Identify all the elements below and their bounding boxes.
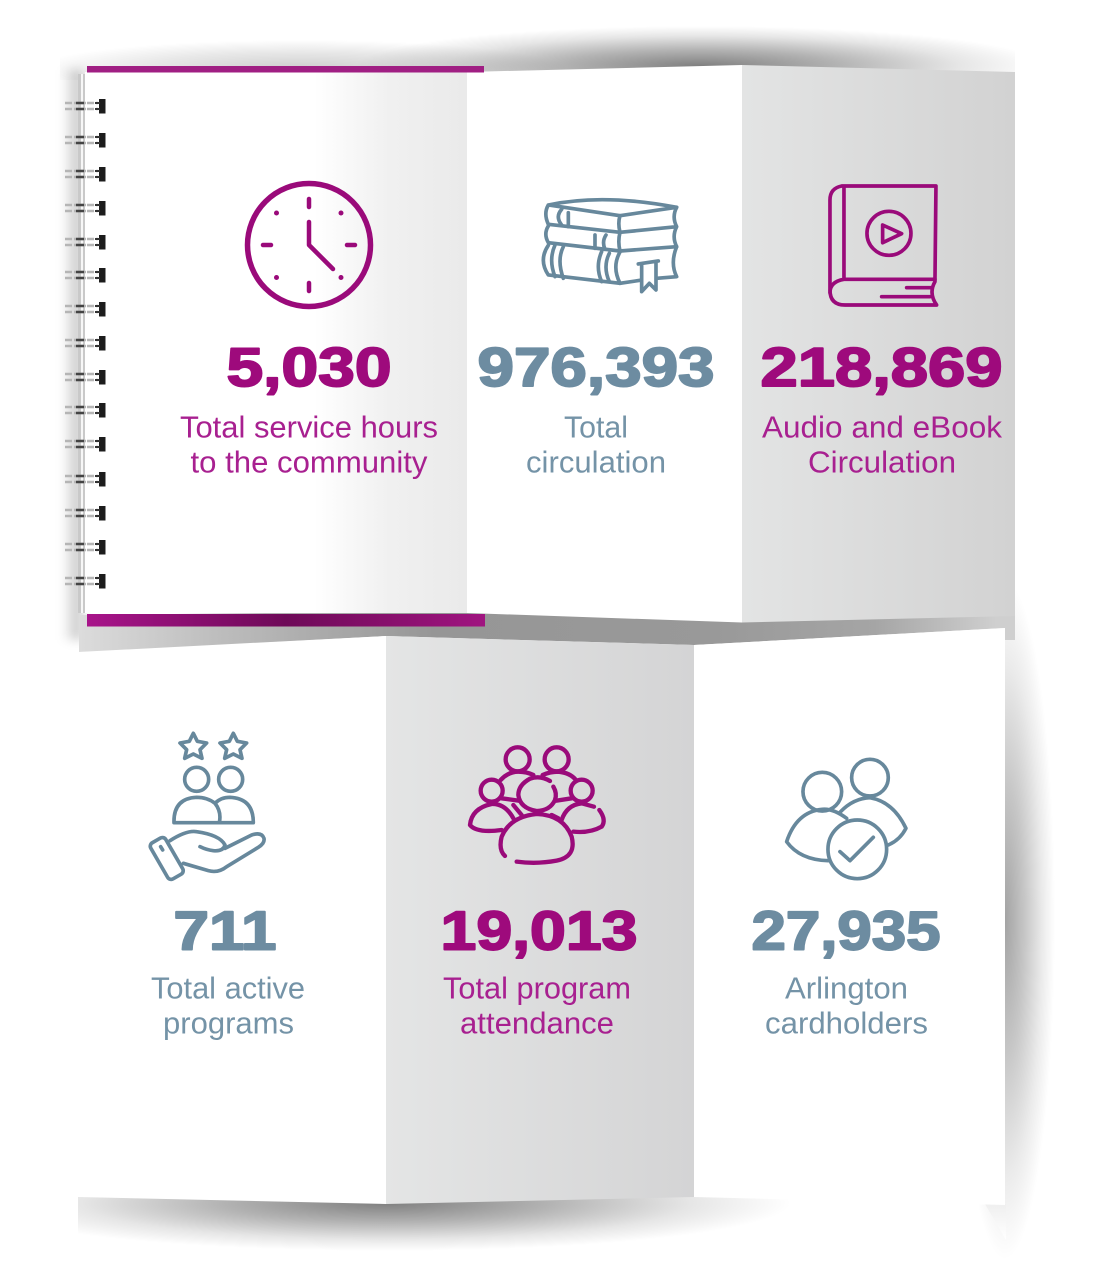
stat: circulation: circulation bbox=[526, 444, 666, 480]
stat: program attendance: attendance bbox=[460, 1006, 614, 1040]
panel: bottom centre page bbox=[386, 636, 694, 1204]
purple top strip bbox=[87, 66, 484, 72]
panel: top left notebook page bbox=[85, 72, 467, 613]
stat: service hours bbox=[180, 336, 438, 480]
stat: audio and ebook: 218,869 bbox=[760, 336, 1002, 398]
stat: circulation bbox=[478, 336, 714, 480]
icon: clock bbox=[248, 184, 370, 306]
stat: active programs: programs bbox=[163, 1006, 294, 1040]
stat: program attendance: Total program bbox=[443, 970, 631, 1006]
icon: group of people bbox=[470, 747, 604, 863]
stat: active programs: Total active bbox=[151, 970, 305, 1006]
stat: audio and ebook: Audio and eBook bbox=[762, 410, 1003, 444]
purple bottom strip bbox=[87, 614, 485, 626]
stat: audio and ebook bbox=[760, 336, 1003, 480]
icon: audio book bbox=[830, 186, 937, 305]
panel: top centre page bbox=[467, 65, 742, 622]
panel: bottom left page bbox=[78, 636, 386, 1204]
icon: cardholders with check bbox=[787, 759, 906, 879]
stat: cardholders: 27,935 bbox=[752, 900, 940, 962]
stat: circulation: Total bbox=[564, 410, 628, 444]
stat: service hours: 5,030 bbox=[226, 336, 392, 398]
stat: program attendance: 19,013 bbox=[440, 900, 638, 962]
shadow wedge between brochures bbox=[79, 605, 1015, 653]
icon: hand holding people bbox=[149, 733, 264, 881]
stat: cardholders: Arlington bbox=[785, 970, 908, 1006]
stat: cardholders: cardholders bbox=[765, 1006, 928, 1040]
stat: program attendance bbox=[440, 900, 638, 1040]
icon: stack of books bbox=[543, 200, 677, 292]
stat: audio and ebook: Circulation bbox=[808, 444, 956, 480]
panel: top right page bbox=[742, 65, 1015, 622]
panel: bottom right page bbox=[694, 628, 1005, 1205]
stat: circulation: 976,393 bbox=[478, 336, 714, 398]
notebook spine bbox=[78, 74, 85, 613]
stat: cardholders bbox=[752, 900, 940, 1040]
stat: active programs bbox=[151, 900, 305, 1040]
stat: service hours: to the community bbox=[190, 444, 428, 480]
stat: service hours: Total service hours bbox=[180, 410, 438, 444]
spiral binding bbox=[65, 99, 106, 588]
stat: active programs: 711 bbox=[174, 900, 276, 962]
